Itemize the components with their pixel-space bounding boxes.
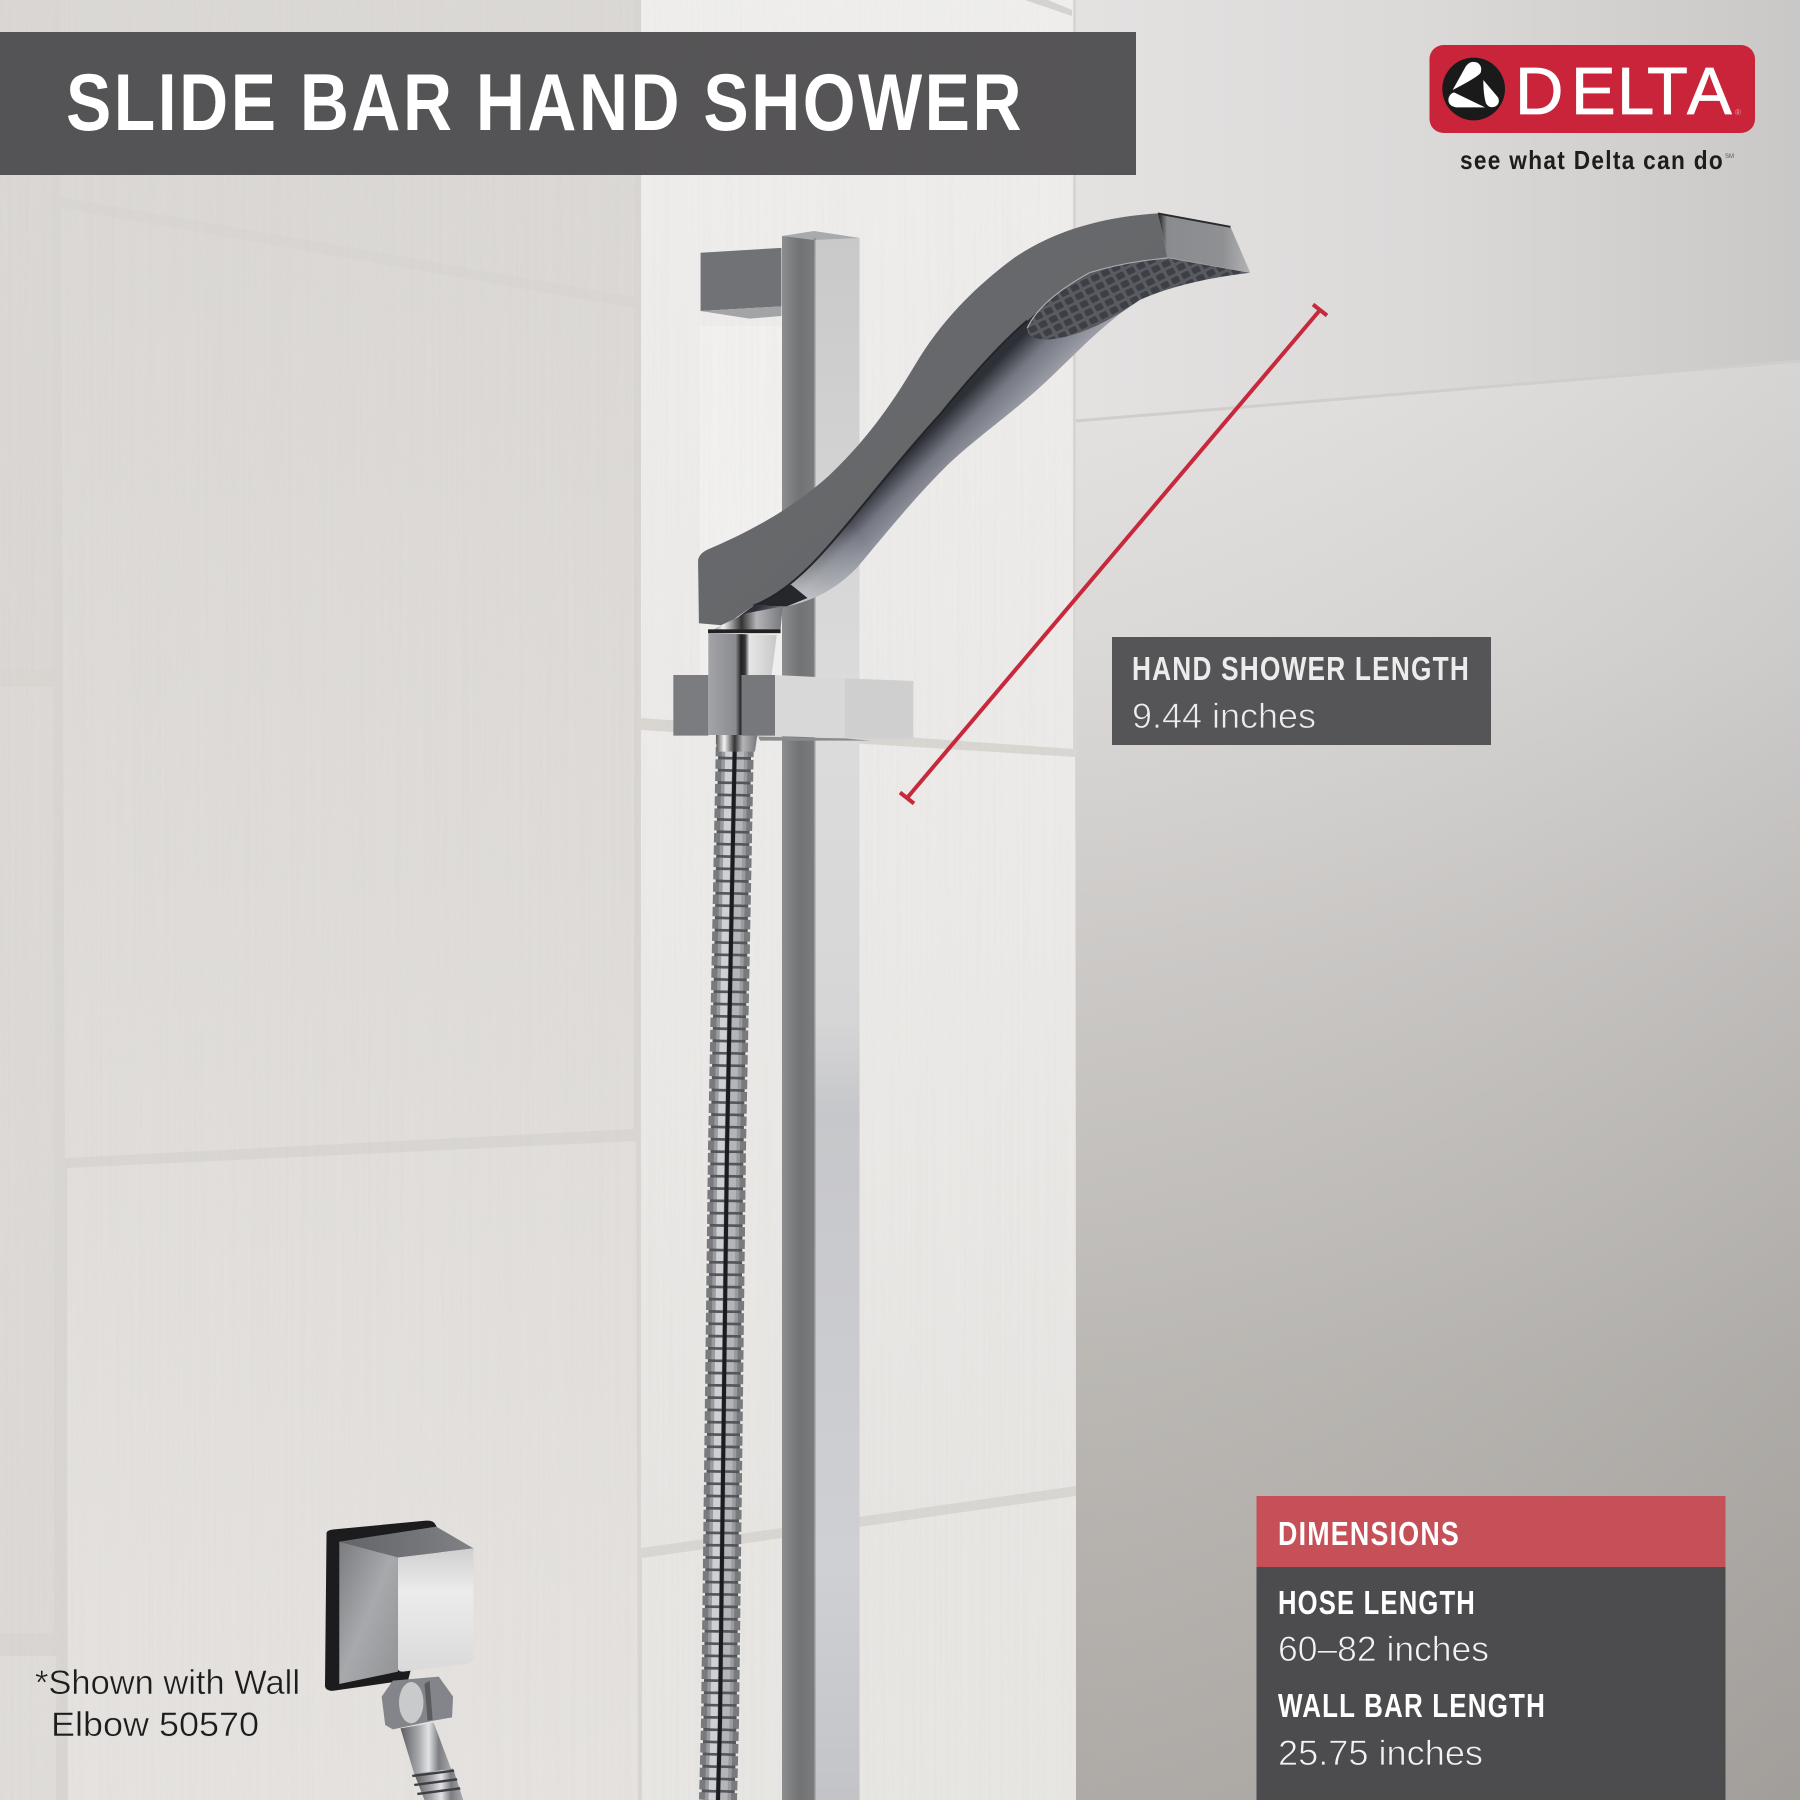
logo wordmark: DELTA [1515, 54, 1732, 129]
title text: SLIDE BAR HAND SHOWER [66, 58, 1024, 148]
shower top surface [698, 213, 1167, 626]
panel: dimensions [1256, 1496, 1726, 1800]
caption: wall elbow note: *Shown with Wall [35, 1664, 300, 1702]
holder cylinder [708, 633, 777, 735]
elbow front face [398, 1548, 473, 1672]
wall bar length: WALL BAR LENGTH [1278, 1687, 1546, 1724]
measurement line: hand shower length [900, 304, 1327, 804]
wall bar length: 25.75 inches [1278, 1734, 1483, 1773]
elbow left face [339, 1542, 398, 1684]
title banner [0, 32, 1136, 175]
slide bar [782, 231, 860, 1800]
elbow swivel nut [382, 1677, 453, 1729]
wall bar length [1278, 1687, 1546, 1773]
hand shower collar [708, 606, 783, 633]
Delta logo [1430, 45, 1755, 175]
hose length [1278, 1584, 1489, 1669]
holder left block [673, 675, 708, 736]
tagline: see what Delta can do [1460, 145, 1724, 175]
hose length: HOSE LENGTH [1278, 1584, 1476, 1621]
elbow top face [339, 1527, 473, 1557]
chrome edge line [754, 321, 1027, 606]
shower tip [1158, 213, 1250, 273]
background: right wall [1075, 0, 1800, 1800]
elbow ribbed hose [412, 1769, 463, 1800]
elbow black plate [325, 1521, 444, 1691]
holder block faces [742, 675, 775, 736]
callout heading: HAND SHOWER LENGTH [1132, 650, 1470, 687]
logo emblem [1442, 58, 1505, 120]
elbow hose stem [401, 1723, 452, 1774]
dimensions header: DIMENSIONS [1278, 1515, 1460, 1552]
callout value: 9.44 inches [1132, 697, 1316, 736]
callout: hand shower length [1112, 637, 1491, 745]
top wall bracket [701, 248, 781, 319]
hose length: 60–82 inches [1278, 1630, 1489, 1669]
hose [712, 735, 741, 1800]
dimensions header [1256, 1496, 1726, 1567]
sliding holder bracket [673, 633, 913, 752]
service mark: SM [1725, 154, 1734, 160]
registered mark: ® [1735, 108, 1741, 117]
caption: wall elbow note [35, 1664, 300, 1744]
shower underside chrome [737, 257, 1250, 618]
wall elbow [325, 1521, 473, 1800]
background: left tiled wall [0, 0, 1076, 1800]
caption: wall elbow note: Elbow 50570 [51, 1706, 259, 1744]
spray face [1027, 258, 1249, 340]
hand shower head [698, 213, 1250, 626]
